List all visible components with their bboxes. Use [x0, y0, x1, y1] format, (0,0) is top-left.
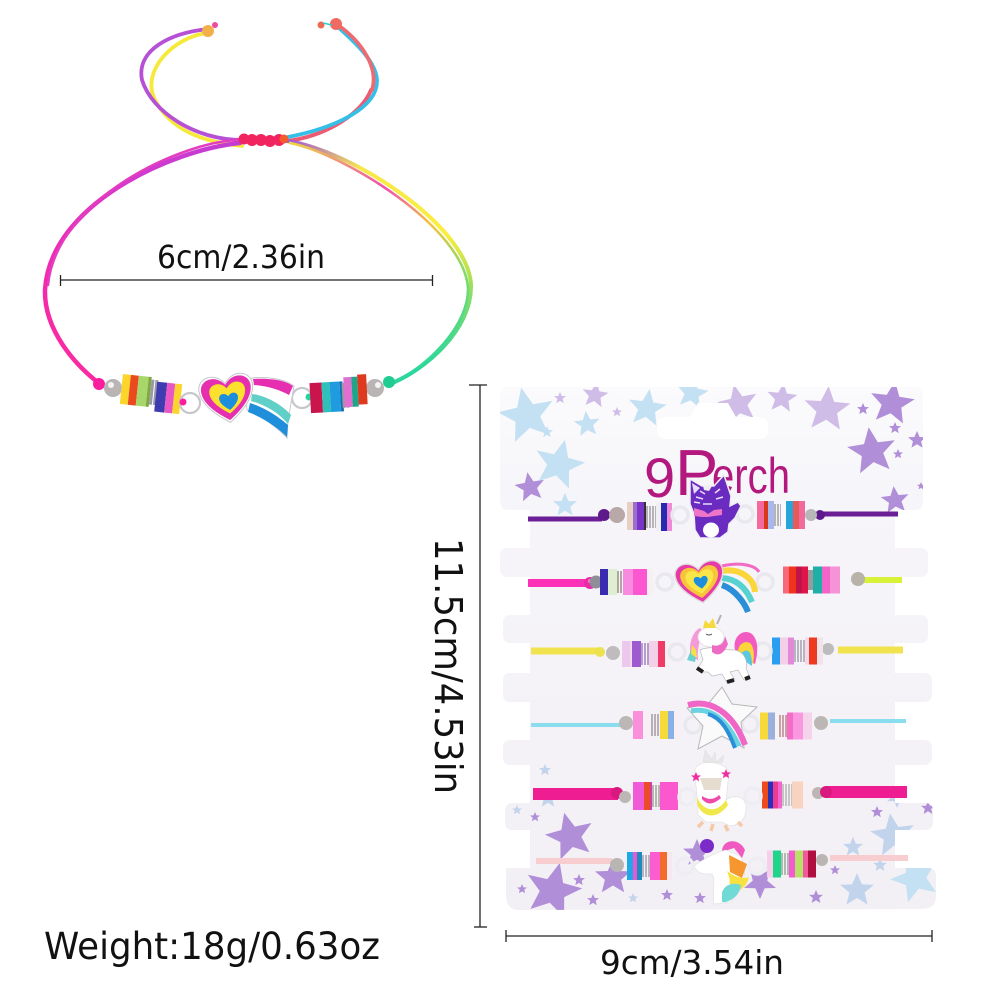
crown and horn [703, 618, 716, 628]
brand logo: erch [712, 448, 790, 504]
cord [531, 721, 906, 725]
heart layers [197, 372, 257, 426]
right beads [762, 782, 812, 808]
left beads [633, 711, 682, 739]
llama charm [691, 750, 746, 831]
tail [735, 632, 757, 664]
cord [531, 650, 903, 651]
left beads [633, 782, 678, 810]
knots and silver end beads [93, 376, 395, 397]
main cord loop [45, 140, 471, 384]
cord [528, 579, 592, 587]
weight label: Weight:18g/0.63oz [44, 925, 380, 968]
heart charm [674, 559, 727, 606]
large bracelet with adjustable cord [45, 18, 471, 438]
cat charm [690, 475, 741, 538]
silver beads [619, 716, 828, 730]
product card [494, 374, 945, 920]
bracelet 2: rainbow heart charm [528, 559, 902, 612]
star pattern [494, 374, 945, 920]
rings [657, 574, 773, 590]
left beads [627, 516, 672, 517]
brand logo: P [675, 436, 718, 509]
right beads [757, 501, 805, 529]
silver beads [584, 572, 865, 589]
card width label: 9cm/3.54in [600, 943, 784, 982]
card width dimension line [506, 930, 932, 942]
adjustable cord loops [141, 25, 377, 146]
rings [672, 506, 753, 523]
height label: 11.5cm/4.53in [426, 538, 470, 794]
small cord ends at rings [180, 394, 312, 406]
jump rings [180, 388, 312, 413]
left beads [600, 569, 653, 595]
hooves [697, 668, 750, 682]
rings [685, 716, 758, 733]
bracelet 3: unicorn charm [531, 615, 903, 683]
silver beads [610, 854, 828, 872]
width dimension line [60, 275, 433, 286]
cord end knots [202, 18, 342, 37]
cord right [857, 577, 902, 583]
left beads [622, 641, 670, 667]
cord [536, 858, 908, 861]
right beads [772, 638, 823, 664]
rainbow tail [245, 377, 294, 438]
rings [679, 788, 761, 805]
card shape [500, 387, 936, 910]
body [698, 648, 750, 683]
rings [669, 643, 771, 660]
cord [533, 792, 907, 794]
bracelet 1: cat charm [528, 475, 898, 538]
knots and silver beads [598, 507, 825, 523]
right beads [760, 712, 812, 740]
shooting heart charm [197, 372, 294, 438]
hang hole [657, 403, 768, 439]
star charm [687, 687, 757, 749]
left beads [627, 852, 672, 880]
bracelet 4: star charm [531, 687, 906, 749]
silver beads [611, 786, 832, 803]
right mane [712, 636, 728, 654]
unicorn head charm [694, 839, 749, 904]
left clay beads [121, 389, 181, 399]
right beads [767, 850, 816, 878]
unicorn charm [687, 615, 757, 683]
head [698, 627, 724, 647]
bracelet 5: llama charm [533, 750, 907, 831]
bracelet 6: unicorn head charm [536, 839, 908, 904]
rings [677, 858, 765, 874]
left mane [690, 628, 704, 660]
brand logo: 9 [644, 446, 675, 509]
rainbow tail [722, 564, 759, 612]
cord [528, 514, 898, 519]
silver beads [595, 643, 834, 660]
right clay beads [310, 389, 367, 398]
height dimension line [469, 385, 487, 927]
right beads [783, 566, 840, 594]
width label: 6cm/2.36in [157, 238, 325, 276]
sliding knot [238, 134, 288, 147]
